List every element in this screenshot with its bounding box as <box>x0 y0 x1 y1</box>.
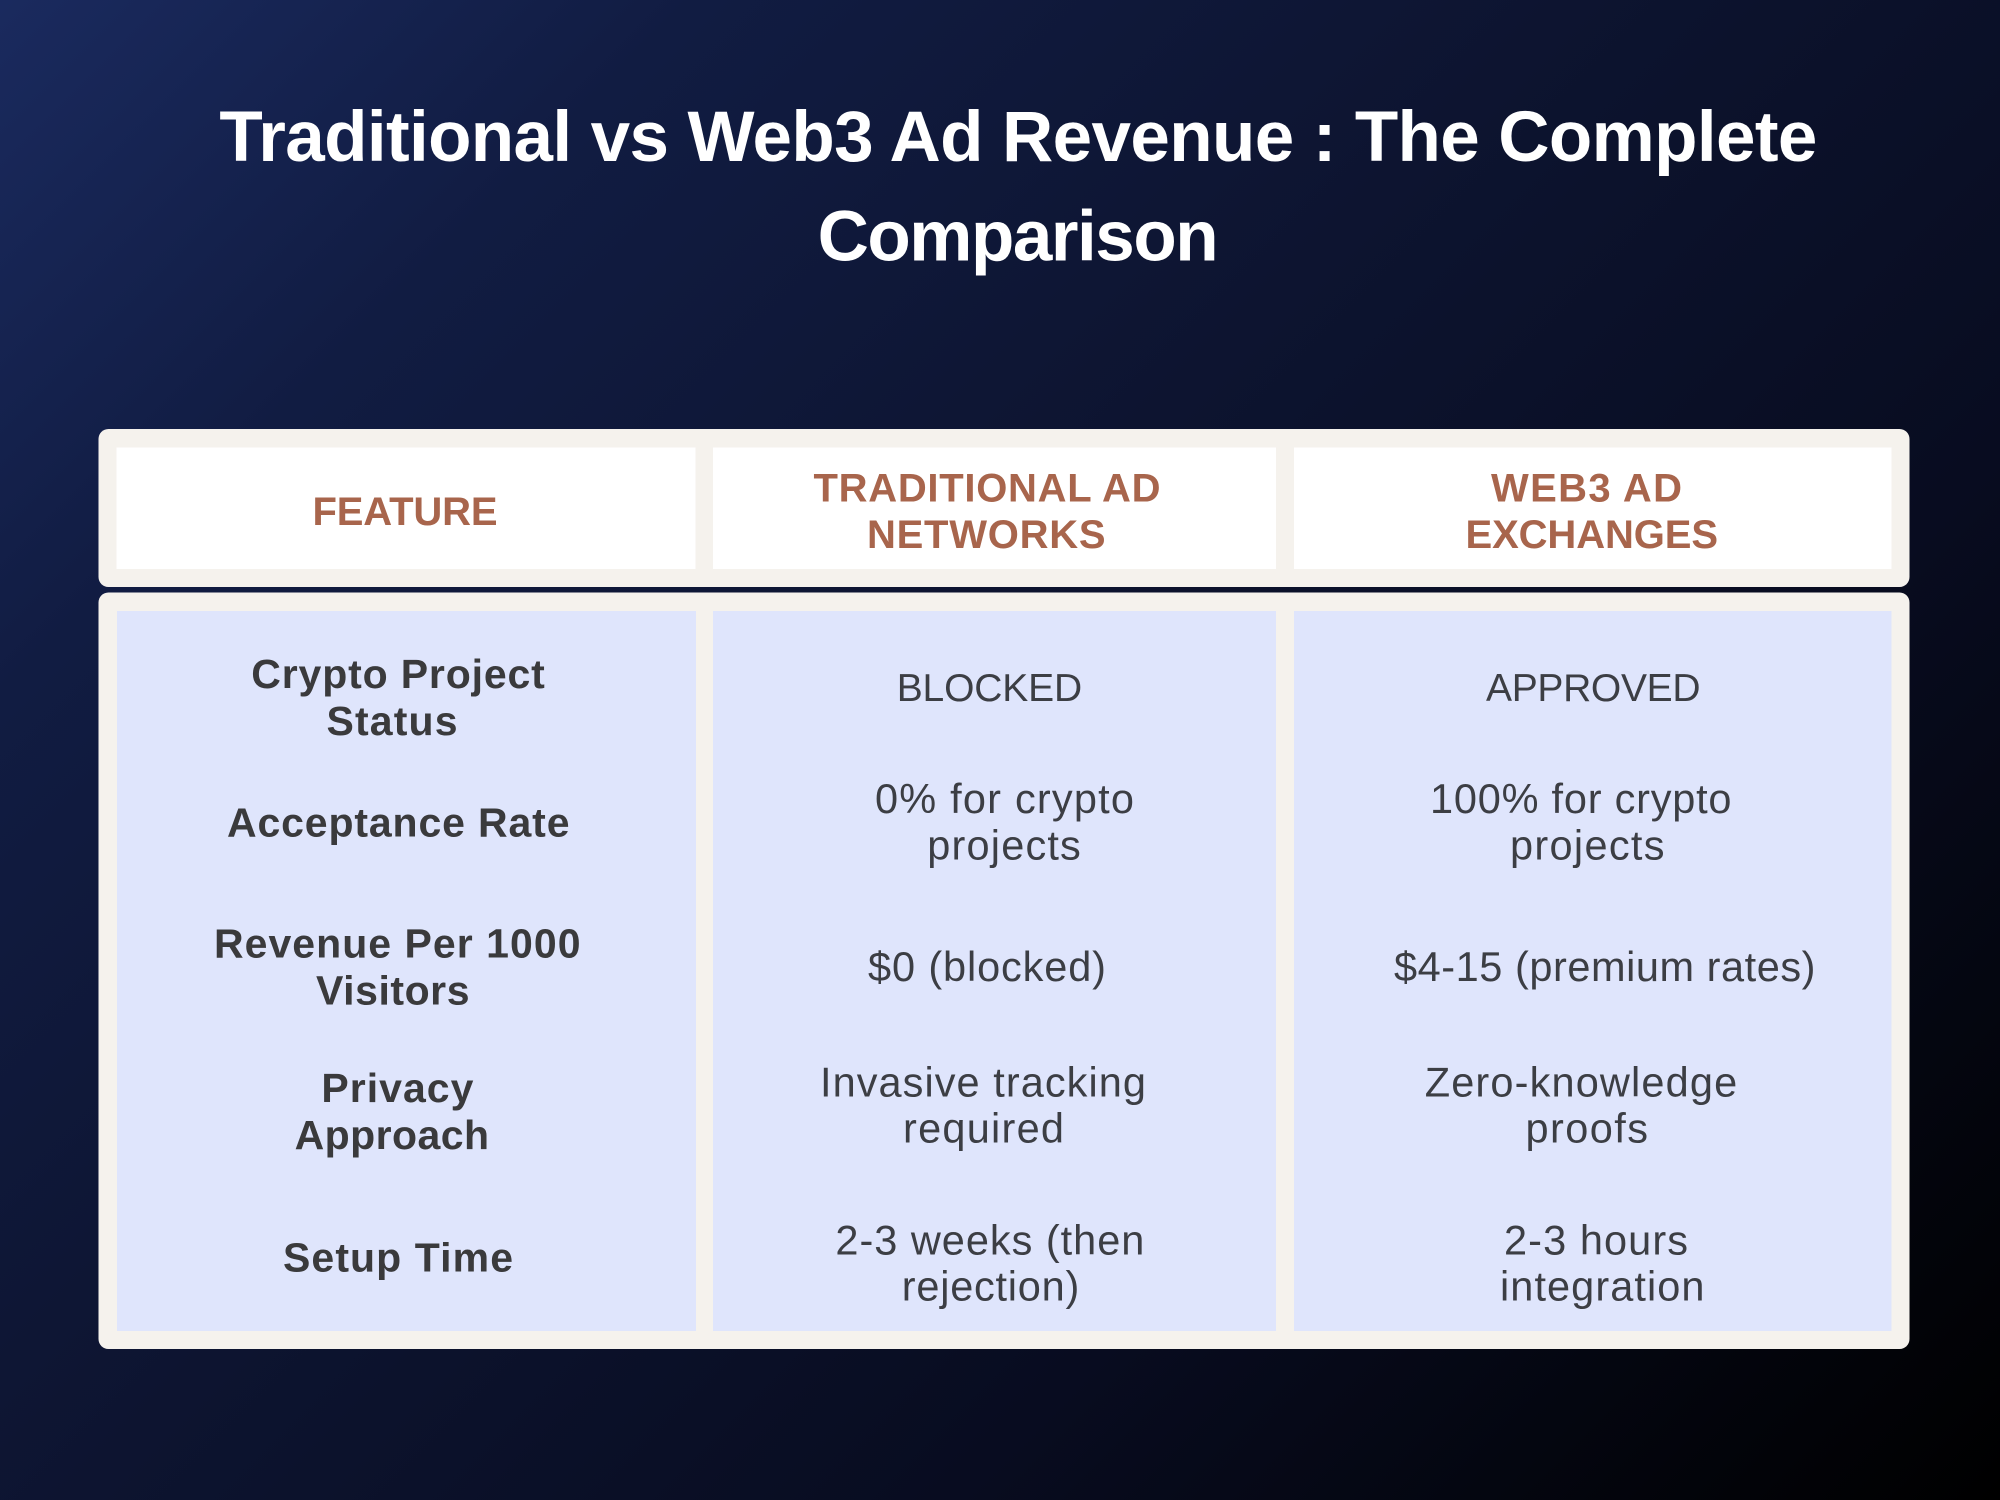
row: revenue per 1000 visitors: Visitors <box>316 968 470 1014</box>
row: privacy approach: proofs <box>1526 1105 1648 1152</box>
row: acceptance rate: projects <box>1510 822 1664 869</box>
row: setup time: rejection) <box>902 1262 1079 1309</box>
heading: web3 ad exchanges: EXCHANGES <box>1466 513 1718 557</box>
row: crypto project status: BLOCKED <box>897 667 1082 710</box>
title <box>219 98 1817 276</box>
heading: web3 ad exchanges: WEB3 AD <box>1491 466 1682 510</box>
row: setup time: integration <box>1500 1262 1704 1309</box>
heading: web3 ad exchanges <box>1466 466 1718 557</box>
heading: traditional ad networks: NETWORKS <box>867 513 1106 557</box>
row: privacy approach: Approach <box>295 1112 489 1158</box>
row: revenue per 1000 visitors: Revenue Per 1000 <box>214 920 580 966</box>
title: Comparison <box>818 198 1219 276</box>
row: setup time: 2-3 weeks (then <box>835 1216 1144 1263</box>
row: acceptance rate: 0% for crypto <box>875 775 1134 822</box>
row: setup time: 2-3 hours <box>1504 1216 1688 1263</box>
heading: traditional ad networks <box>814 466 1160 557</box>
row: revenue per 1000 visitors: $0 (blocked) <box>868 943 1106 990</box>
panel: table body <box>98 592 1910 1349</box>
row: crypto project status: Status <box>326 698 458 744</box>
row: crypto project status <box>251 651 1700 744</box>
row: acceptance rate <box>227 775 1732 869</box>
heading: traditional ad networks: TRADITIONAL AD <box>814 466 1160 510</box>
title: Traditional vs Web3 Ad Revenue : The Complete <box>219 98 1817 177</box>
row: acceptance rate: 100% for crypto <box>1430 775 1732 822</box>
row: acceptance rate: Acceptance Rate <box>227 800 570 846</box>
panel: table header <box>98 429 1910 587</box>
row: crypto project status: Crypto Project <box>251 651 545 697</box>
row: privacy approach: required <box>903 1105 1064 1152</box>
heading: feature: FEATURE <box>312 490 498 534</box>
row: setup time <box>283 1216 1704 1309</box>
row: privacy approach: Zero-knowledge <box>1425 1058 1737 1105</box>
row: revenue per 1000 visitors: $4-15 (premium rates) <box>1394 943 1816 990</box>
row: privacy approach <box>295 1058 1737 1158</box>
row: privacy approach: Privacy <box>321 1065 474 1111</box>
row: setup time: Setup Time <box>283 1235 513 1281</box>
row: crypto project status: APPROVED <box>1486 667 1700 710</box>
row: acceptance rate: projects <box>927 822 1081 869</box>
row: privacy approach: Invasive tracking <box>820 1058 1146 1105</box>
row: revenue per 1000 visitors <box>214 920 1816 1014</box>
